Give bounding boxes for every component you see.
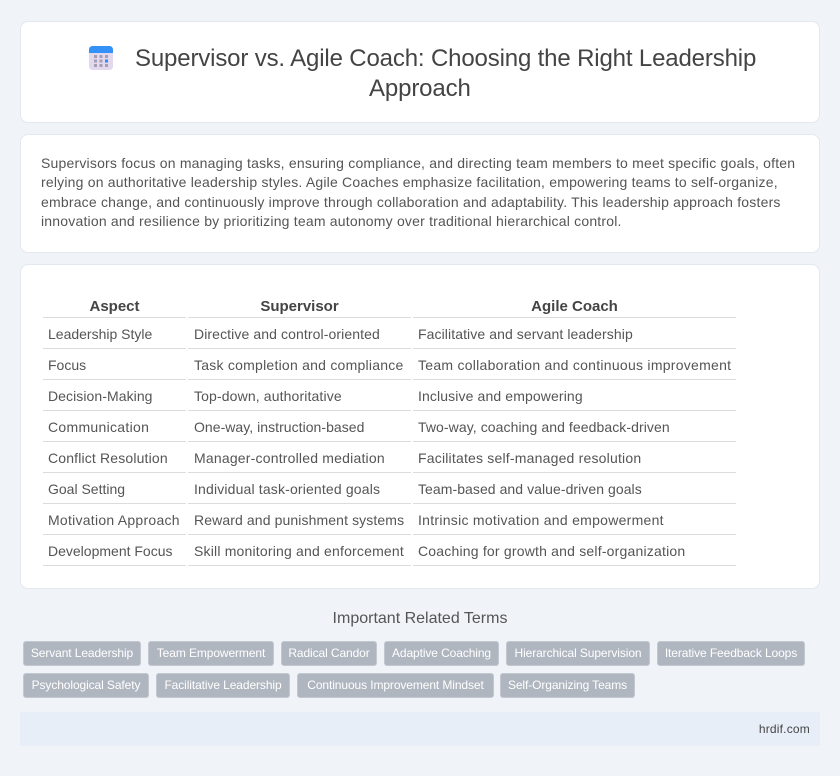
tag: Servant Leadership xyxy=(31,646,133,660)
tag: Team Empowerment xyxy=(157,646,265,660)
table: aspect, supervisor, agile coach: Communication xyxy=(48,418,149,434)
table: aspect, supervisor, agile coach: Conflict Resolution xyxy=(48,450,168,466)
tag list: related terms xyxy=(23,641,805,698)
table: aspect, supervisor, agile coach: Individual task-oriented goals xyxy=(194,480,380,496)
table: aspect, supervisor, agile coach: Development Focus xyxy=(48,542,173,558)
table: aspect, supervisor, agile coach: Team collaboration and continuous improvement xyxy=(418,356,731,372)
tag xyxy=(297,673,494,698)
table: aspect, supervisor, agile coach: One-way, instruction-based xyxy=(194,418,364,434)
tag: Adaptive Coaching xyxy=(392,646,491,660)
text block: introduction: relying on authoritative leadership styles. Agile Coaches emphasize facilitation, empowering teams to self-organize, xyxy=(41,174,778,190)
table: aspect, supervisor, agile coach: Supervisor xyxy=(260,298,339,314)
table: aspect, supervisor, agile coach: Manager-controlled mediation xyxy=(194,450,385,466)
table: aspect, supervisor, agile coach: Leadership Style xyxy=(48,326,152,342)
text block: introduction: innovation and resilience by prioritizing team autonomy over traditional hierarchical control. xyxy=(41,213,622,229)
table: aspect, supervisor, agile coach: Team-based and value-driven goals xyxy=(418,480,642,496)
table: aspect, supervisor, agile coach: Top-down, authoritative xyxy=(194,388,342,404)
table: aspect, supervisor, agile coach: Intrinsic motivation and empowerment xyxy=(418,512,664,528)
panel: introduction xyxy=(20,134,820,253)
text block: introduction xyxy=(41,155,795,229)
title xyxy=(135,45,756,102)
footer: source xyxy=(20,712,820,746)
footer: source: hrdif.com xyxy=(759,722,810,736)
table: aspect, supervisor, agile coach: Directive and control-oriented xyxy=(194,326,380,342)
table: aspect, supervisor, agile coach: Reward and punishment systems xyxy=(194,512,404,528)
table: aspect, supervisor, agile coach: Coaching for growth and self-organization xyxy=(418,542,685,558)
icon: calendar xyxy=(89,46,113,70)
tag xyxy=(148,641,274,666)
table: aspect, supervisor, agile coach: Facilitative and servant leadership xyxy=(418,326,633,342)
tag: Iterative Feedback Loops xyxy=(665,646,797,660)
table: aspect, supervisor, agile coach: Inclusive and empowering xyxy=(418,388,583,404)
tag: Psychological Safety xyxy=(32,678,140,692)
tag xyxy=(384,641,499,666)
table: aspect, supervisor, agile coach: Goal Setting xyxy=(48,480,125,496)
tag xyxy=(281,641,377,666)
panel: comparison table xyxy=(20,264,820,589)
table: aspect, supervisor, agile coach: Motivation Approach xyxy=(48,512,180,528)
tag xyxy=(23,673,149,698)
text block: introduction: embrace change, and continuously improve through collaboration and adaptability. This leadership approach fosters xyxy=(41,194,781,210)
table: aspect, supervisor, agile coach: Task completion and compliance xyxy=(194,356,404,372)
tag: Self-Organizing Teams xyxy=(508,678,627,692)
tag: Hierarchical Supervision xyxy=(514,646,642,660)
table: aspect, supervisor, agile coach: Skill monitoring and enforcement xyxy=(194,542,404,558)
table: aspect, supervisor, agile coach xyxy=(43,298,736,566)
table: aspect, supervisor, agile coach: Facilitates self-managed resolution xyxy=(418,450,641,466)
tag: Continuous Improvement Mindset xyxy=(307,678,484,692)
text block: introduction: Supervisors focus on managing tasks, ensuring compliance, and directing team members to meet specific goals, often xyxy=(41,155,795,171)
panel: header xyxy=(20,21,820,123)
title: Approach xyxy=(369,75,471,102)
tag xyxy=(156,673,290,698)
tag xyxy=(506,641,650,666)
tag xyxy=(657,641,805,666)
tag: Radical Candor xyxy=(288,646,370,660)
table: aspect, supervisor, agile coach: Focus xyxy=(48,356,86,372)
tag xyxy=(23,641,141,666)
table: aspect, supervisor, agile coach: Decision-Making xyxy=(48,388,153,404)
heading: related terms: Important Related Terms xyxy=(333,610,507,627)
tag: Facilitative Leadership xyxy=(164,678,282,692)
table: aspect, supervisor, agile coach: Two-way, coaching and feedback-driven xyxy=(418,418,670,434)
table: aspect, supervisor, agile coach: Agile Coach xyxy=(531,298,618,314)
title: Supervisor vs. Agile Coach: Choosing the Right Leadership xyxy=(135,45,756,72)
table: aspect, supervisor, agile coach: Aspect xyxy=(89,298,140,314)
tag xyxy=(500,673,635,698)
